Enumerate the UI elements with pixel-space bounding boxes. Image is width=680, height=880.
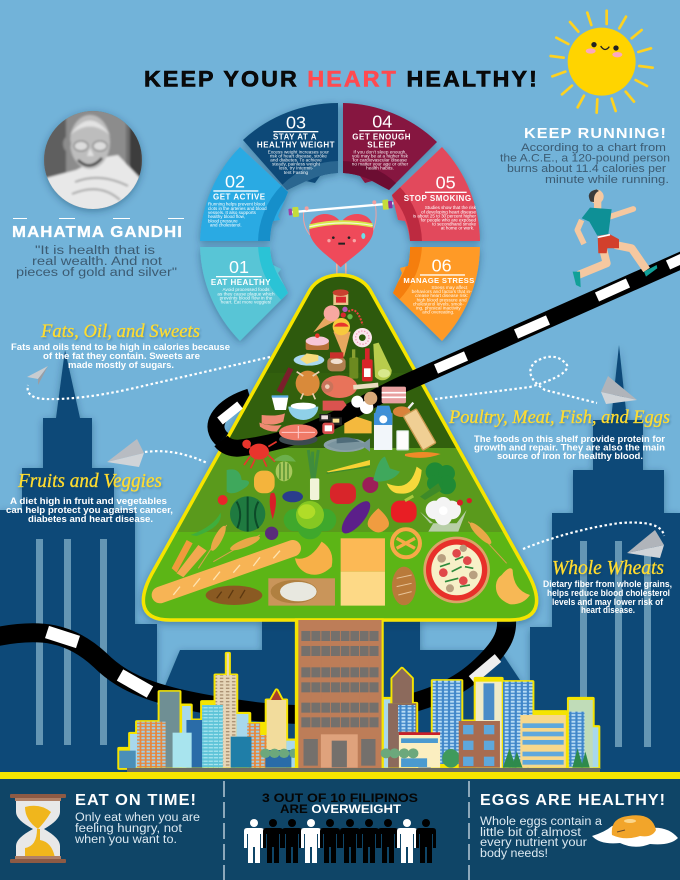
text 02: blood pressure [208,218,238,223]
segment 01 eat healthy [196,244,291,345]
keep running text: According to a chart from [521,142,666,154]
heart lifting barbell [288,199,393,275]
heading: filipinos [262,793,418,816]
keep running text [500,142,670,186]
food pyramid [130,270,550,622]
dotted path 4 [523,523,664,549]
skyline: left tower [0,350,300,772]
text 06: cholesterol levels, smok- [413,301,464,306]
keep running heading: KEEP RUNNING! [524,125,667,142]
text 03: loss, try Intermit- [279,166,314,171]
text 03: steady, painless weight [272,162,321,167]
label: poultry meat fish eggs: The foods on this shelf provide protein for [474,434,665,444]
gandhi quote: pieces of gold and silver" [16,267,177,279]
city yellow outline [119,653,598,768]
text 06: 06 [432,255,452,275]
keep running text: minute while running. [545,174,669,186]
heading: filipinos: ARE OVERWEIGHT [280,804,401,816]
text: eggs: body needs! [480,848,548,860]
text 05: for people who are exposed [421,217,476,222]
text 03: risk of heart disease, stroke [270,153,327,158]
gandhi quote: real wealth. And not [32,256,163,268]
paper plane 1 [27,366,48,385]
road: lower winding [0,610,507,715]
pyramid shelves [148,276,530,618]
label: poultry meat fish eggs: Poultry, Meat, Fish, and Eggs [448,407,670,428]
label: poultry meat fish eggs [448,407,670,461]
label: whole wheats [543,557,672,615]
text 05: to secondhand smoke [432,221,476,226]
text 04: you may be at a higher risk [352,153,409,158]
text 01 [211,257,275,305]
sun disc and face [568,28,636,96]
label: fruits and veggies: Fruits and Veggies [17,470,162,492]
text 06: MANAGE STRESS [403,276,475,285]
heading: filipinos: 3 OUT OF 10 FILIPINOS [262,793,418,805]
pale fill buildings [130,699,598,768]
text: eggs [480,816,603,860]
dotted path 2 [145,451,207,463]
label: fruits and veggies [6,470,173,524]
food items (coordinates follow the pyramid) [160,289,530,606]
label: whole wheats: Whole Wheats [552,557,664,579]
text: eggs: Whole eggs contain a [480,816,603,828]
text 03: HEALTHY WEIGHT [257,140,335,149]
text 03: Excess weight increases your [268,149,329,154]
icon: hourglass [10,794,66,863]
central tower [295,618,384,768]
text 02: clots in the arteries and blood [208,206,267,211]
text: eat on time: Only eat when you are [75,812,200,824]
heading: eggs: EGGS ARE HEALTHY! [480,792,666,809]
text 05: is about 25 to 30 percent higher [413,213,476,218]
segment 05 stop smoking [388,147,484,247]
text 02: 02 [225,171,245,191]
segment 02 get active [196,147,291,247]
text 05: Studies show that the risk [425,205,477,210]
wheel text [208,111,477,314]
city ground strip [127,768,600,772]
crab [242,440,277,468]
bottom panel [0,779,680,880]
text 04 [352,111,411,171]
segment 06 manage stress [390,244,484,345]
left buildings [119,653,298,768]
paper plane 4 [627,530,664,558]
segment 04 enough sleep [339,101,439,195]
label: whole wheats: Dietary fiber from whole grains, [543,579,672,589]
text 06: ing, physical inactivity [416,305,461,310]
wheel of heart tips [200,103,480,341]
text 02: Running helps prevent blood [208,202,266,207]
sweets and oils [294,289,392,381]
cityscape [119,618,598,768]
gandhi quote: "It is health that is [35,245,155,257]
text 01: EAT HEALTHY [211,278,271,287]
text: eggs: every nutrient your [480,837,587,849]
road: upper diagonal crossing pyramid [220,252,680,448]
text 01: prevents blood flow in the [220,295,273,300]
yellow band [0,772,680,779]
paper plane 3 [601,376,637,404]
label: whole wheats: levels and may lower risk of [552,597,664,607]
text 01: as they cause plaque which [217,291,275,296]
segment 03 healthy weight [240,101,342,194]
label: poultry meat fish eggs: growth and repair. They are also the main [474,442,665,452]
text 06: crease heart disease risk: [415,293,468,298]
text 04: If you don't sleep enough, [353,149,407,154]
text: eat on time: feeling hungry, not [75,823,183,835]
text: eggs: little bit of almost [480,827,582,839]
gandhi name: MAHATMA GANDHI [12,224,183,241]
text 02: healthy blood flow, [208,214,245,219]
title: KEEP YOUR HEART HEALTHY! [144,66,539,92]
text 04: no matter your age or other [352,161,409,166]
sun [551,11,653,113]
road: left curl behind pyramid [216,397,265,445]
text 03 [257,112,335,175]
text 03: tent Fasting [284,170,309,175]
label: fats oil sweets: of the fat they contain. Sweets are [43,351,200,361]
label: whole wheats: helps reduce blood cholesterol [547,588,670,598]
text 05: at home or work. [441,226,474,231]
text 02 [208,171,267,228]
paper plane 2 [107,439,144,467]
text 02: GET ACTIVE [213,193,266,202]
text 02: and cholesterol. [210,223,242,228]
text 02: vessels. It also supports [208,210,257,215]
gandhi portrait [44,110,142,215]
text 04: health habits. [366,166,394,171]
text 01: heart. Eat more veggies! [221,300,271,305]
text 06: high blood pressure and [417,297,467,302]
grains and breads [160,520,530,606]
text 03: and diabetes. To achieve [270,158,322,163]
text 05: STOP SMOKING [404,194,472,203]
label: fruits and veggies: can help protect you against cancer, [6,505,173,515]
label: fats oil sweets: Fats, Oil, and Sweets [40,321,200,342]
keep running text: burns about 11.4 calories per [507,163,666,175]
text 01: Avoid processed foods [222,287,270,292]
text 03: 03 [286,112,306,132]
label: fats oil sweets: Fats and oils tend to be high in calories because [11,342,230,352]
text 06: behaviors and factors that in- [412,289,472,294]
text 06: and overeating. [422,309,454,314]
label: whole wheats: heart disease. [581,605,635,615]
right buildings [381,668,593,768]
gandhi quote [16,245,177,279]
vegetables and fruit [191,450,472,540]
label: fruits and veggies: A diet high in fruit and vegetables [10,496,167,506]
label: poultry meat fish eggs: source of iron for healthy blood. [497,451,643,461]
text 04: for cardiovascular disease [353,157,407,162]
column dividers [224,781,469,880]
label: fats oil sweets: made mostly of sugars. [68,360,174,370]
text 06: Stress may affect [431,285,468,290]
label: fats oil sweets [11,321,230,370]
keep running text: the A.C.E., a 120-pound person [500,152,670,164]
text 05: of developing heart disease [421,209,476,214]
text 04: SLEEP [367,140,396,149]
proteins [259,367,436,452]
text 04: GET ENOUGH [352,133,411,142]
sun rays [551,11,653,113]
text: eat on time [74,812,200,846]
dotted path 3 [435,357,597,403]
skyline: window stripes [36,539,651,747]
heading: eat on time: EAT ON TIME! [75,792,197,809]
text 04: 04 [372,111,392,131]
icon row: ten people, three white [244,819,436,863]
text 06 [403,255,475,314]
icon: lazy egg [592,815,678,847]
label: fruits and veggies: diabetes and heart disease. [28,514,153,524]
runner [573,189,657,287]
gandhi name dashes [13,218,184,219]
skyline: right tower [380,345,680,772]
text 01: 01 [229,257,249,277]
text 03: STAY AT A [273,133,317,142]
text 05 [404,172,477,231]
text: eat on time: when you want to. [74,834,177,846]
text 05: 05 [436,172,456,192]
dotted path 1 [28,357,270,399]
